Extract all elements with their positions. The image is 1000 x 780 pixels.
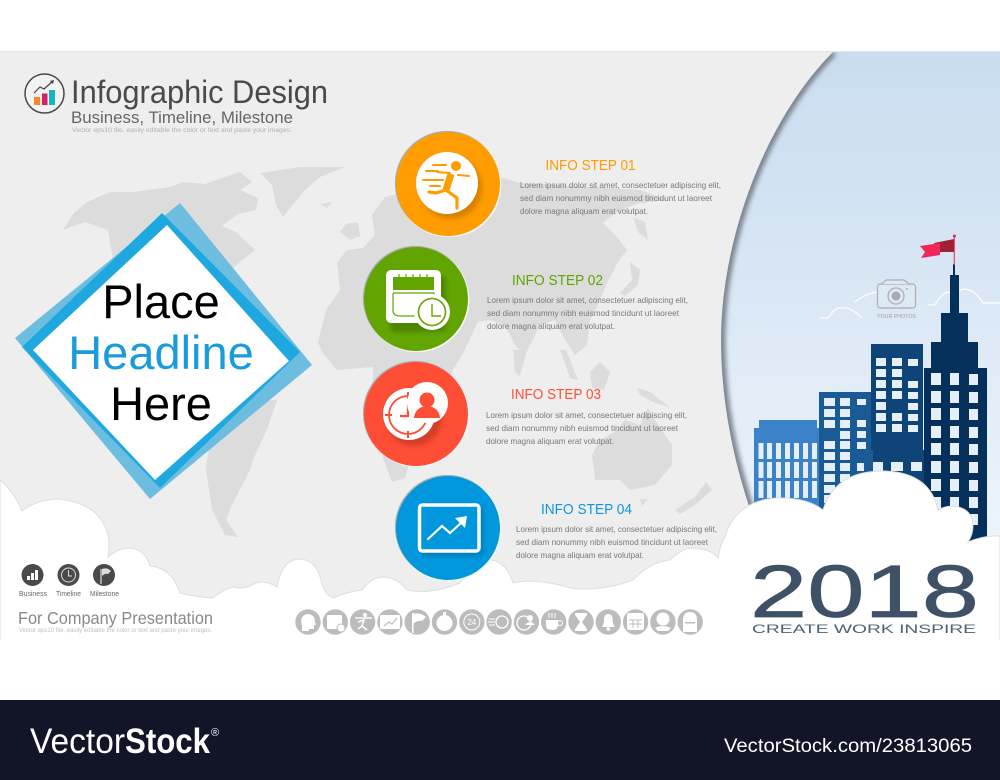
icon: 24 hours (459, 609, 484, 635)
step title: INFO STEP 01 (546, 158, 636, 174)
icon: chart (377, 609, 403, 635)
icon row (295, 609, 703, 635)
step body: dolore magna aliquam erat volutpat. (486, 436, 614, 446)
step title: INFO STEP 03 (511, 387, 601, 403)
step 01 (395, 131, 721, 237)
headline text: Place (102, 275, 220, 328)
step body: sed diam nonummy nibh euismod tincidunt ut laoreet (486, 423, 679, 433)
camera placeholder: YOUR PHOTOS (877, 314, 917, 320)
title block (25, 74, 328, 134)
icon: calendar clock (323, 609, 348, 635)
green badge (363, 246, 468, 350)
icon: head idea (295, 609, 321, 635)
icon: flag (404, 609, 430, 635)
image id: VectorStock.com/23813065 (724, 736, 972, 757)
icon: hourglass (568, 609, 594, 635)
headline diamond (15, 203, 312, 499)
step body: Lorem ipsum dolor sit amet, consectetuer adipiscing elit, (520, 180, 721, 190)
company presentation text: For Company Presentation (18, 608, 213, 628)
step body: sed diam nonummy nibh euismod tincidunt ut laoreet (516, 537, 709, 547)
icon: stopwatch (432, 609, 457, 635)
year 2018: 2018 (750, 550, 979, 633)
heading: Infographic Design (71, 74, 328, 110)
white clouds foreground (0, 471, 1000, 660)
bottom-left small icons (19, 564, 119, 598)
step body: Lorem ipsum dolor sit amet, consectetuer adipiscing elit, (516, 524, 717, 534)
main frame (22, 213, 300, 488)
icon: clock person (514, 609, 539, 635)
step title: INFO STEP 04 (541, 502, 632, 518)
icon: calendar with clock (386, 270, 450, 330)
icon: runner (423, 161, 469, 208)
step body (520, 180, 721, 216)
step body: dolore magna aliquam erat volutpat. (516, 550, 644, 560)
icon: trend chart (420, 505, 479, 551)
company presentation text: Vector eps10 file, easily editable the color or text and paste your images. (19, 628, 212, 634)
icon: fast clock (486, 609, 512, 635)
top border line (0, 51, 1000, 52)
icon: coffee (541, 609, 566, 635)
step body: sed diam nonummy nibh euismod tincidunt ut laoreet (487, 308, 680, 318)
step body: Lorem ipsum dolor sit amet, consectetuer adipiscing elit, (486, 410, 687, 420)
icon: runner (350, 609, 375, 635)
icon: hand clock (650, 609, 676, 635)
logo icon (25, 74, 64, 113)
step title: INFO STEP 02 (512, 273, 603, 289)
icon: milestone stone (678, 609, 703, 635)
step 03 (363, 361, 687, 467)
tagline: CREATE WORK INSPIRE (752, 622, 976, 636)
world map (63, 167, 712, 537)
vectorstock logo: VectorStock (30, 722, 210, 761)
icon: milestone: Milestone (90, 589, 119, 598)
icon: 24 hours: 24 (467, 618, 477, 627)
icon: clock and person (383, 382, 448, 440)
blue badge (395, 475, 500, 580)
icon: timeline: Timeline (56, 589, 81, 598)
light-blue back square (15, 203, 312, 499)
building: mid blue (819, 392, 873, 522)
sky clouds outline (820, 289, 1000, 318)
headline diamond: Headline (68, 326, 254, 379)
icon: business: Business (19, 589, 47, 598)
camera placeholder (877, 280, 917, 320)
building: navy (871, 344, 924, 484)
building: light blue (754, 420, 819, 506)
step 02 (363, 246, 688, 352)
building: dark tower with flag (920, 234, 987, 545)
icon: bell (596, 609, 621, 635)
orange badge (395, 131, 500, 236)
registered mark: ® (211, 727, 219, 739)
red badge (363, 361, 468, 466)
subheading: Business, Timeline, Milestone (71, 109, 293, 127)
step 04 (395, 475, 717, 581)
step body: dolore magna aliquam erat volutpat. (487, 321, 615, 331)
step body: dolore magna aliquam erat volutpat. (520, 206, 648, 216)
step body: Lorem ipsum dolor sit amet, consectetuer adipiscing elit, (487, 295, 688, 305)
white strip above footer (0, 640, 1000, 700)
caption: Vector eps10 file, easily editable the color or text and paste your images. (72, 127, 292, 134)
icon: calendar (623, 609, 648, 635)
step body (516, 524, 717, 560)
headline diamond: Here (110, 377, 212, 430)
paper-cut shadow (721, 52, 833, 515)
sky panel with city (715, 52, 1000, 572)
step body: sed diam nonummy nibh euismod tincidunt ut laoreet (520, 193, 713, 203)
step body (486, 410, 687, 446)
gray background panel (0, 52, 1000, 652)
footer bar (0, 700, 1000, 780)
step body (487, 295, 688, 331)
